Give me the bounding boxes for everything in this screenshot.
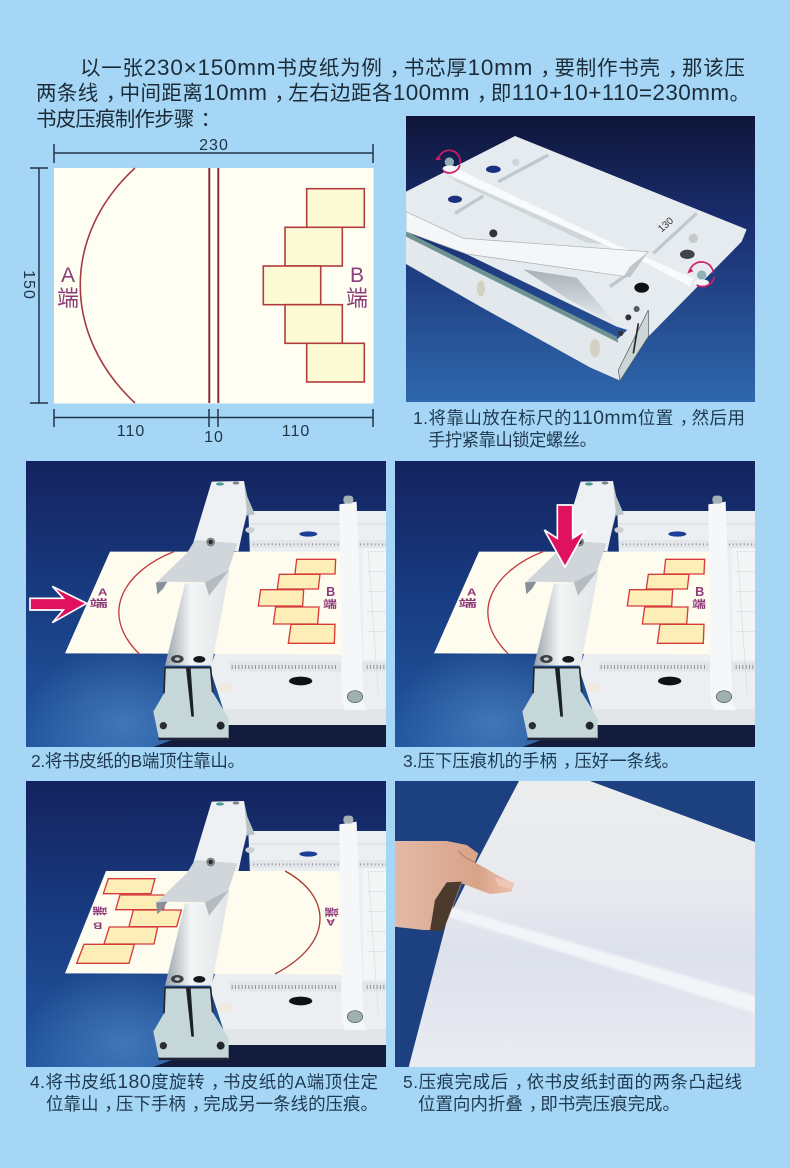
press arm	[406, 212, 648, 277]
B-end bricks	[263, 189, 364, 382]
caption: step 2: 2.将书皮纸的B端顶住靠山。	[31, 751, 245, 771]
crease line	[448, 907, 757, 1013]
heading text block: 书皮压痕制作步骤 ：	[36, 108, 221, 131]
arrow pointing right	[30, 586, 87, 623]
A-end arc	[80, 168, 135, 403]
crease lines	[209, 168, 218, 403]
panel: step 5 photo	[394, 781, 757, 1068]
paper end labels: 端	[692, 597, 706, 610]
paper end labels	[90, 585, 337, 610]
white sheet	[408, 781, 757, 1068]
heading text block: 以一张230×150mm书皮纸为例 ，书芯厚10mm ，要制作书壳 ，那该压	[80, 55, 745, 80]
panel: dimension diagram	[20, 137, 374, 446]
caption: step 3: 3.压下压痕机的手柄 ，压好一条线。	[403, 751, 679, 771]
panel: step 1 photo	[406, 116, 755, 402]
rotated paper	[65, 871, 342, 974]
dimension lines	[30, 144, 373, 427]
paper end labels: 端	[90, 598, 108, 610]
paper end labels: 端	[459, 598, 477, 610]
caption: step 5: 5.压痕完成后 ，依书皮纸封面的两条凸起线	[403, 1072, 742, 1092]
arrow pointing down	[544, 505, 586, 567]
rotated paper: 端	[92, 905, 108, 916]
end labels	[57, 264, 368, 311]
knob right with rotation arrow	[687, 262, 714, 287]
dimension labels: 10	[204, 429, 224, 446]
caption: step 1	[413, 407, 745, 450]
paper end labels: B	[695, 585, 704, 599]
hand	[394, 841, 514, 931]
caption: step 5: 位置向内折叠 ，即书壳压痕完成。	[418, 1094, 680, 1114]
paper end labels: A	[98, 586, 108, 598]
dimension labels	[20, 137, 310, 446]
panel: step 3 photo	[395, 461, 756, 747]
paper end labels: A	[467, 586, 477, 598]
fence bar	[447, 169, 693, 287]
panel: step 4 photo	[26, 781, 387, 1067]
rulers and holes	[455, 155, 697, 287]
dimension labels: 230	[199, 137, 229, 154]
rotated paper: A	[326, 916, 335, 927]
heading text block: 两条线 ，中间距离10mm ，左右边距各100mm ，即110+10+110=230mm。	[36, 80, 750, 105]
caption: step 1: 手拧紧靠山锁定螺丝。	[428, 430, 597, 450]
machine model mark: 130	[656, 215, 676, 235]
dimension labels: 110	[282, 423, 310, 440]
rotated paper: 端	[324, 906, 339, 918]
shadow under arm	[524, 270, 608, 316]
end labels: A	[61, 264, 75, 287]
bracket	[618, 310, 648, 381]
end labels: B	[350, 264, 364, 287]
caption: step 4	[30, 1071, 378, 1114]
end labels: 端	[57, 286, 79, 311]
caption: step 4: 4.将书皮纸180度旋转 ，书皮纸的A端顶住定	[30, 1071, 378, 1093]
knob left with rotation arrow	[435, 150, 460, 173]
heading text block	[36, 55, 750, 131]
paper end labels: 端	[323, 597, 337, 610]
caption: step 1: 1.将靠山放在标尺的110mm位置 ，然后用	[413, 407, 745, 429]
paper end labels: B	[326, 585, 335, 599]
paper end labels	[459, 585, 706, 610]
panel: step 2 photo	[26, 461, 387, 747]
caption: step 5	[403, 1072, 742, 1114]
dimension labels: 150	[20, 270, 37, 300]
caption: step 4: 位靠山 ，压下手柄 ，完成另一条线的压痕。	[46, 1094, 378, 1114]
dimension labels: 110	[117, 423, 145, 440]
rotated paper: B	[93, 920, 102, 930]
paper sheet	[54, 168, 374, 404]
machine body	[406, 232, 648, 381]
end labels: 端	[346, 286, 368, 311]
